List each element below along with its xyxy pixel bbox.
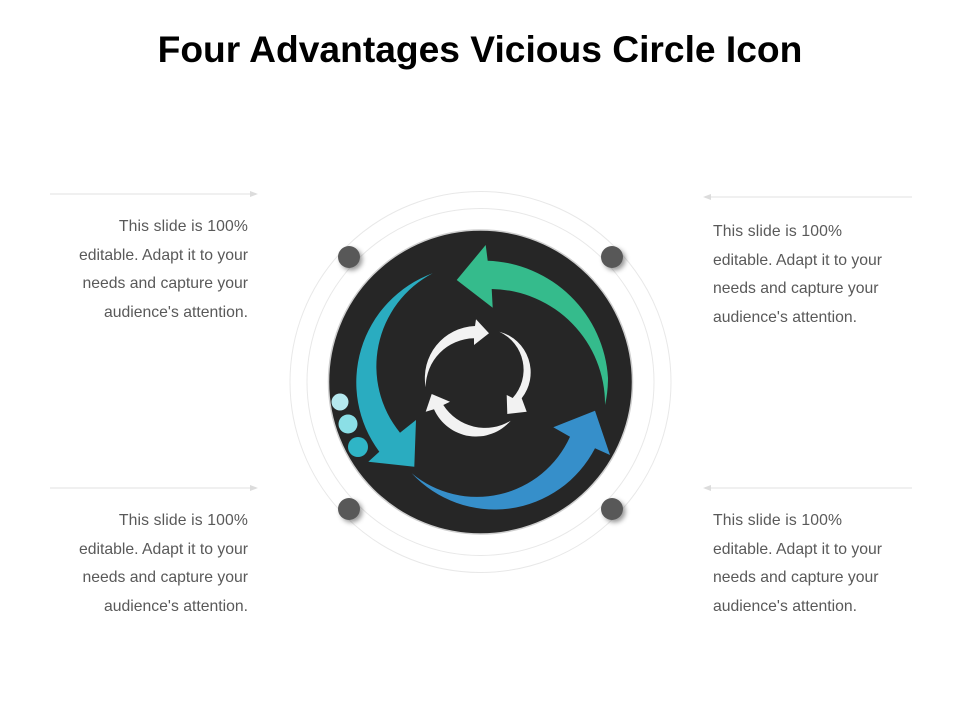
text block: top left (79, 218, 248, 321)
small dots (332, 394, 368, 457)
text block: top left: This slide is 100% (119, 218, 248, 235)
arrow: teal (356, 273, 433, 467)
text block: top left: audience's attention. (104, 304, 248, 321)
text block: top left: needs and capture your (82, 275, 248, 292)
text block: bottom right: This slide is 100% (713, 512, 842, 529)
text block: bottom right: editable. Adapt it to your (713, 541, 882, 558)
title: Four Advantages Vicious Circle Icon (158, 28, 802, 70)
arrow: top right pointer (703, 194, 912, 200)
text block: bottom right (713, 512, 882, 615)
text block: bottom left: editable. Adapt it to your (79, 541, 248, 558)
connector dots (338, 246, 623, 520)
arrow: blue (412, 411, 610, 509)
text block: top left: editable. Adapt it to your (79, 247, 248, 264)
outer rings (290, 192, 671, 572)
text block: bottom right: needs and capture your (713, 569, 878, 586)
arrow: top left pointer (50, 191, 258, 197)
arrow: green (457, 245, 608, 405)
text block: top right: needs and capture your (713, 280, 878, 297)
text block: top right: editable. Adapt it to your (713, 252, 882, 269)
text block: top right: audience's attention. (713, 309, 857, 326)
dark central disc (328, 230, 632, 534)
text block: bottom left: audience's attention. (104, 598, 248, 615)
text block: top right (713, 223, 882, 326)
arrow: bottom right pointer (703, 485, 912, 491)
text block: bottom left: This slide is 100% (119, 512, 248, 529)
text block: bottom right: audience's attention. (713, 598, 857, 615)
arrow: bottom left pointer (50, 485, 258, 491)
text block: top right: This slide is 100% (713, 223, 842, 240)
text block: bottom left: needs and capture your (82, 569, 248, 586)
icon: white cycle arrows (425, 319, 531, 437)
text block: bottom left (79, 512, 248, 615)
